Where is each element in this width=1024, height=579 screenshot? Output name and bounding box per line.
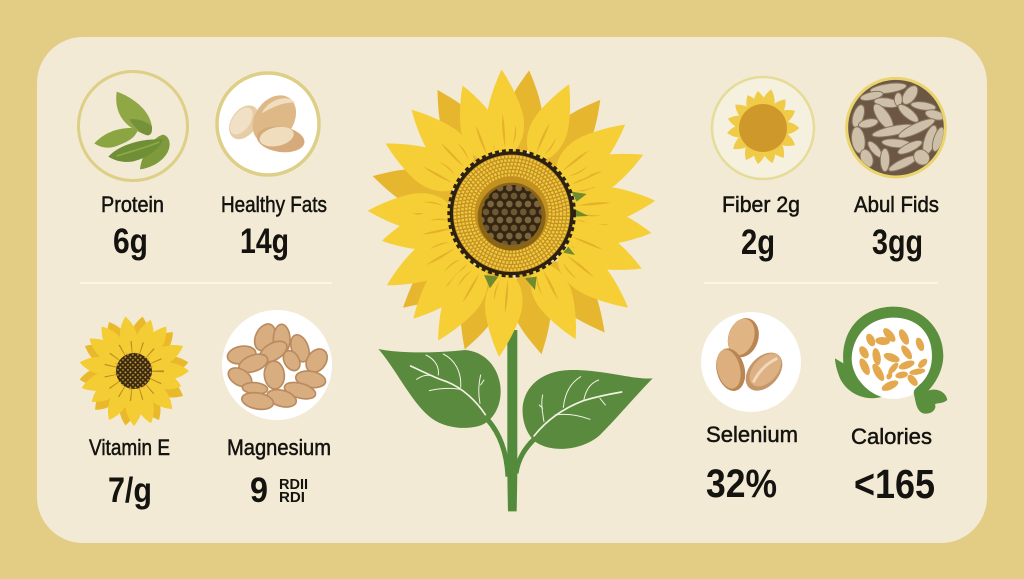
seed disk [449, 150, 575, 276]
stat: abul fids: Abul Fids [854, 192, 939, 217]
icon: selenium nuts [701, 312, 801, 412]
stat: fiber: 2g [741, 223, 775, 262]
illustration: sunflower head [367, 68, 657, 358]
stat: magnesium: RDI [279, 490, 305, 506]
right leaf [523, 370, 653, 449]
stat: magnesium: RDII [279, 477, 308, 493]
stat: abul fids [854, 192, 939, 262]
icon: magnesium seeds [222, 310, 332, 420]
stat: protein: 6g [113, 222, 148, 261]
stat: vitamin E: 7/g [108, 471, 152, 510]
stat: calories: Calories [851, 424, 932, 449]
icon: seed pile circle [847, 78, 947, 177]
stat: abul fids: 3gg [872, 223, 923, 262]
stat: protein [101, 192, 164, 261]
icon: calories ring [835, 307, 947, 414]
icon: vitamin E flower [78, 315, 190, 427]
stat: fiber: Fiber 2g [722, 192, 800, 217]
left leaf [378, 349, 501, 428]
back petals [368, 68, 620, 358]
stat: magnesium: 9 [250, 471, 268, 510]
stat: protein: Protein [101, 192, 164, 217]
front petals [367, 68, 657, 358]
icon: protein leaves [78, 72, 188, 180]
stat: healthy fats: 14g [240, 222, 289, 261]
stat: fiber [722, 192, 800, 262]
stat: vitamin E [89, 435, 170, 510]
stat: selenium [706, 422, 798, 506]
stat: selenium: Selenium [706, 422, 798, 447]
icon: fiber flower [712, 77, 814, 179]
illustration: stem and leaves [378, 330, 653, 511]
stat: selenium: 32% [706, 462, 777, 506]
icon: healthy fats nuts [217, 73, 319, 175]
stat: healthy fats: Healthy Fats [221, 192, 327, 217]
stat: vitamin E: Vitamin E [89, 435, 170, 460]
stat: calories: <165 [854, 461, 935, 507]
stat: healthy fats [221, 192, 327, 261]
stat: magnesium: Magnesium [227, 435, 331, 460]
stat: calories [851, 424, 935, 507]
stat: magnesium [227, 435, 331, 510]
